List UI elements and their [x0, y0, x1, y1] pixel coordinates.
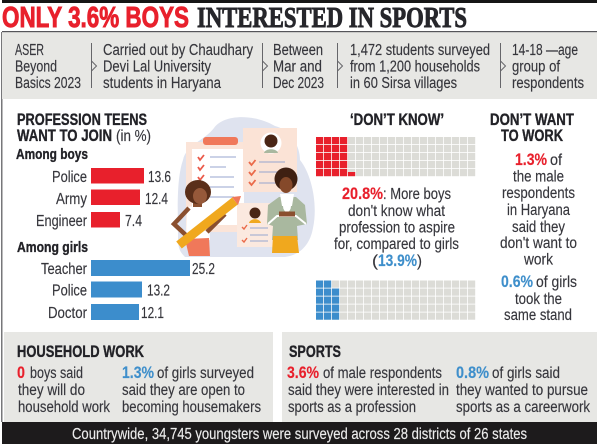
text: girls sports: 0.8% — [456, 364, 489, 382]
text: male respondents don't want to work: the male — [513, 168, 564, 186]
text: girls same stand: of girls — [536, 274, 577, 291]
text: boys sports: 3.6% — [287, 364, 319, 382]
text: boys sports — [287, 364, 449, 416]
right woman — [267, 168, 307, 253]
text: girls sports: of girls said — [492, 365, 560, 382]
bar: doctor: 12.1 — [141, 305, 164, 322]
bar: doctor: Doctor — [48, 305, 87, 322]
text: boys household: 0 — [17, 364, 25, 382]
title — [2, 2, 467, 34]
fact: ASER — [15, 42, 81, 92]
text: don't know explanation: don't know what — [348, 203, 446, 220]
background blob — [178, 117, 315, 257]
bar: teacher: Teacher — [41, 261, 87, 278]
text: boys sports: said they were interested in — [288, 382, 449, 399]
illustration: two women with checklists — [174, 117, 315, 257]
text: don't know explanation: ) — [417, 253, 422, 270]
bar: police boys: 13.6 — [148, 169, 171, 186]
text: boys household: boys said — [30, 365, 83, 382]
divider arrow 4 — [500, 43, 506, 88]
text: male respondents don't want to work: said they — [512, 219, 565, 236]
left frame line — [1, 32, 2, 422]
bar chart: among girls — [17, 239, 215, 322]
bar: police girls: 13.2 — [147, 282, 170, 300]
heading: profession teens want to join: (in %) — [116, 128, 151, 145]
text: don't know explanation: for, compared to girls — [334, 236, 459, 253]
resume card — [243, 128, 297, 192]
heading: don't know: ‘DON’T KNOW’ — [350, 111, 444, 129]
text: don't know explanation: 13.9% — [378, 252, 417, 270]
bar: army — [56, 190, 168, 208]
panel: household work — [4, 332, 273, 422]
top black rule — [2, 0, 597, 3]
text: don't know explanation: 20.8% — [342, 185, 383, 203]
bar: police boys: Police — [52, 169, 87, 186]
fact: ASER: Basics 2023 — [15, 75, 81, 92]
fact: carried out by: students in Haryana — [103, 75, 221, 92]
bar: doctor — [48, 304, 164, 322]
fact: sample size — [350, 42, 490, 92]
text: girls household — [122, 364, 261, 416]
fact: age group: respondents — [512, 75, 584, 92]
fact: sample size: from 1,200 households — [350, 58, 480, 76]
text: male respondents don't want to work: work — [523, 252, 553, 268]
footer bar — [2, 422, 597, 444]
text: girls same stand: 0.6% — [501, 273, 533, 291]
text: boys household — [17, 364, 110, 416]
bar chart: among boys: Among boys — [16, 146, 88, 163]
fact: carried out by: Carried out by Chaudhary — [103, 42, 253, 59]
text: don't know explanation — [334, 185, 459, 270]
divider arrow 3 — [338, 43, 342, 88]
fact: period: Mar and — [273, 58, 322, 76]
text: girls same stand: same stand — [504, 307, 572, 324]
text: girls sports — [456, 364, 590, 416]
bar: teacher: 25.2 — [192, 261, 215, 278]
text: boys household: they will do — [18, 382, 85, 399]
heading: profession teens want to join — [17, 111, 151, 145]
panel: survey facts band — [2, 31, 597, 99]
panel: sports — [282, 332, 597, 422]
left woman — [174, 180, 225, 256]
text: girls household: said they are open to — [122, 382, 245, 399]
bar: teacher — [41, 260, 215, 278]
text: don't know explanation: ( — [372, 253, 379, 270]
bar: army: 12.4 — [145, 191, 168, 208]
text: male respondents don't want to work: don't want to — [500, 235, 577, 252]
bar: engineer: 7.4 — [125, 213, 142, 230]
text: girls household: of girls surveyed — [157, 365, 254, 382]
bar chart: among girls: Among girls — [17, 239, 88, 256]
text: girls same stand: took the — [515, 291, 562, 308]
fact: carried out by — [103, 42, 253, 92]
fact: age group — [512, 42, 584, 92]
fact: age group: 14-18 —age — [512, 42, 578, 59]
heading: don't want to work: DON’T WANT — [490, 111, 574, 129]
bar: police girls: Police — [52, 282, 87, 300]
heading: profession teens want to join: PROFESSION TEENS — [17, 111, 147, 129]
bar: army: Army — [56, 191, 87, 208]
bar: police girls — [52, 282, 170, 300]
heading: don't want to work — [490, 111, 574, 145]
fact: ASER: Beyond — [15, 58, 57, 76]
clipboard — [186, 137, 244, 232]
divider arrow 2 — [262, 43, 268, 88]
text: girls household: 1.3% — [122, 364, 154, 382]
text: don't know explanation: : More boys — [383, 186, 451, 203]
fact: carried out by: Devi Lal University — [103, 58, 211, 76]
text: male respondents don't want to work: 1.3% — [515, 151, 547, 169]
text: male respondents don't want to work: of — [550, 152, 563, 169]
divider arrow 1 — [92, 43, 96, 88]
waffle chart: boys 20.8 — [316, 137, 476, 177]
fact: sample size: 1,472 students surveyed — [350, 42, 490, 59]
bar: engineer — [36, 212, 142, 230]
waffle chart: girls 13.9 — [316, 280, 476, 320]
text: male respondents don't want to work — [500, 151, 577, 268]
text: don't know explanation: profession to aspire — [339, 220, 455, 236]
heading: don't want to work: TO WORK — [501, 127, 563, 145]
small card — [237, 203, 273, 247]
fact: sample size: in 60 Sirsa villages — [350, 75, 457, 92]
fact: period — [273, 42, 324, 92]
heading: profession teens want to join: WANT TO JOIN — [17, 127, 112, 145]
fact: ASER: ASER — [15, 42, 44, 59]
title: ONLY 3.6% BOYS — [2, 2, 189, 34]
pencil — [179, 201, 235, 245]
bar: police boys — [52, 168, 171, 186]
text: boys household: household work — [18, 399, 110, 416]
fact: period: Dec 2023 — [273, 75, 324, 92]
text: girls household: becoming housemakers — [122, 399, 261, 416]
bar: engineer: Engineer — [36, 213, 87, 230]
fact: age group: group of — [512, 58, 561, 76]
fact: period: Between — [273, 42, 323, 59]
heading: sports: SPORTS — [289, 343, 341, 361]
bar chart: among boys — [16, 146, 171, 230]
title: INTERESTED IN SPORTS — [197, 2, 467, 34]
text: male respondents don't want to work: in Haryana — [507, 202, 570, 219]
text: boys sports: sports as a profession — [288, 399, 416, 416]
text: girls same stand — [501, 273, 577, 324]
text: male respondents don't want to work: respondents — [502, 185, 575, 202]
heading: household work: HOUSEHOLD WORK — [17, 343, 144, 361]
text: boys sports: of male respondents — [323, 365, 442, 382]
